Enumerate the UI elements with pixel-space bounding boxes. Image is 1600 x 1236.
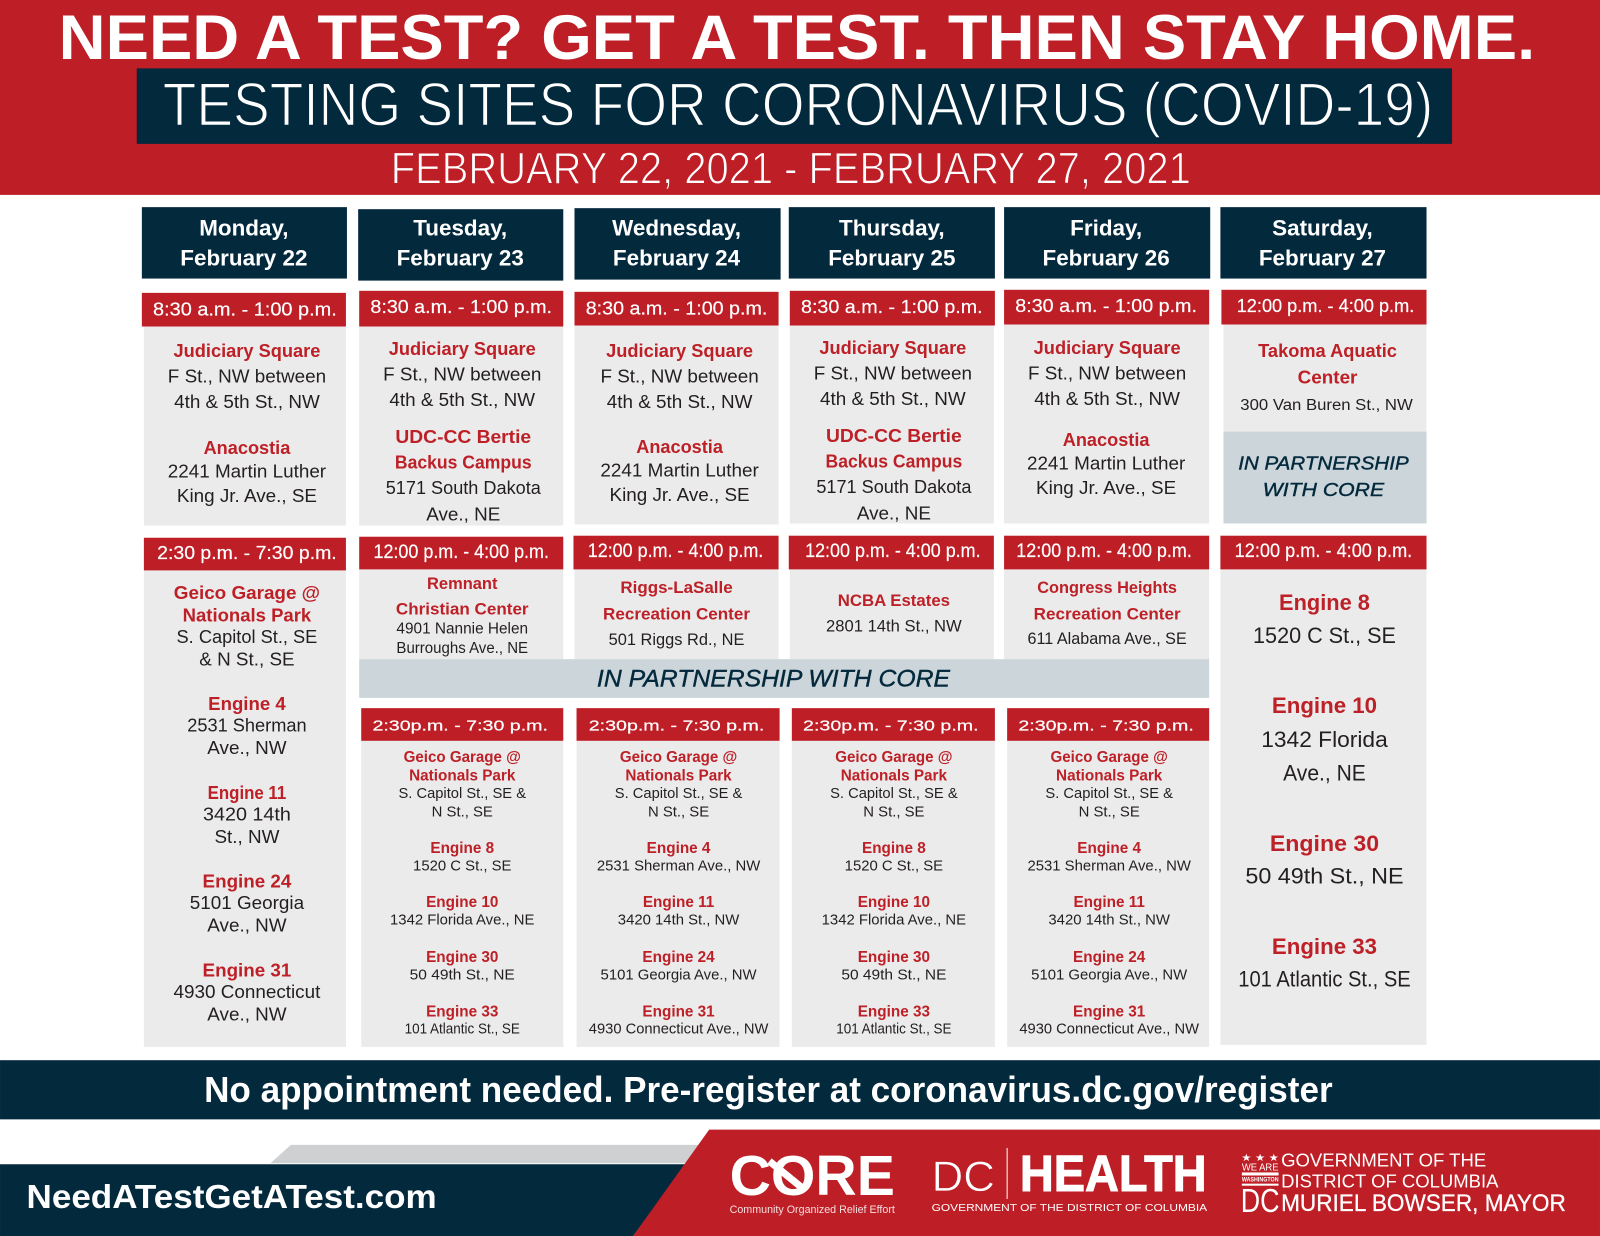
time bar: 8:30 a.m. - 1:00 p.m. [586,297,767,318]
time bar [144,538,346,570]
title: NEED A TEST? GET A TEST. THEN STAY HOME. [59,3,1535,73]
day header: Tuesday: Tuesday, [413,216,507,241]
panel: Monday afternoon: 5101 Georgia [190,892,305,913]
panel: Monday morning: Anacostia [204,437,291,458]
registration banner [0,1060,1600,1119]
footer website band: NeedATestGetATest.com [27,1179,437,1216]
panel: Tuesday afternoon: 101 Atlantic St., SE [405,1022,520,1038]
panel: Wednesday midday: 501 Riggs Rd., NE [609,631,744,649]
panel: Wednesday midday: Recreation Center [603,604,750,623]
panel: Thursday afternoon: Engine 10 [858,894,930,911]
time bar: 12:00 p.m. - 4:00 p.m. [588,540,763,562]
panel: Wednesday morning: F St., NW between [600,366,759,387]
time bar [1004,536,1209,569]
panel: Friday afternoon: Nationals Park [1056,768,1163,785]
time bar: 12:00 p.m. - 4:00 p.m. [805,540,981,562]
header banner [0,0,1600,195]
panel: Wednesday afternoon: 2531 Sherman Ave., NW [597,858,760,874]
panel: Saturday afternoon: 50 49th St., NE [1245,864,1404,889]
panel: Tuesday morning: Backus Campus [395,451,532,472]
panel: Tuesday afternoon: N St., SE [432,804,493,820]
day header: Monday: February 22 [180,245,307,270]
panel: Thursday morning: 4th & 5th St., NW [820,388,966,409]
panel: Tuesday afternoon [361,708,563,1047]
panel: Tuesday midday [359,537,563,659]
panel: Friday morning: F St., NW between [1028,363,1186,384]
panel: Monday afternoon: 3420 14th [203,803,291,824]
panel: Friday morning: King Jr. Ave., SE [1036,477,1176,498]
panel: Friday afternoon [1007,708,1209,1047]
panel: Saturday morning: 300 Van Buren St., NW [1240,397,1413,414]
panel: Friday midday: Congress Heights [1037,578,1177,597]
partnership banner: IN PARTNERSHIP WITH CORE [597,666,951,693]
day header: Monday: Monday, [199,216,289,241]
day header: Wednesday [574,208,781,280]
panel: Friday afternoon: 5101 Georgia Ave., NW [1031,968,1187,984]
panel: Friday afternoon: Geico Garage @ [1051,749,1168,766]
time bar: 2:30 p.m. - 7:30 p.m. [157,542,337,563]
logo: Government of DC: WE ARE [1242,1162,1279,1173]
panel: Monday morning: 4th & 5th St., NW [174,391,320,412]
day header: Saturday: February 27 [1259,245,1386,270]
panel: Wednesday morning: 4th & 5th St., NW [607,391,753,412]
panel: Saturday afternoon: 1342 Florida [1261,727,1389,752]
time bar: 8:30 a.m. - 1:00 p.m. [153,298,337,319]
day header: Wednesday: Wednesday, [612,216,741,241]
time bar: 12:00 p.m. - 4:00 p.m. [373,541,549,563]
time bar: 2:30p.m. - 7:30 p.m. [372,719,548,735]
panel: Thursday midday: NCBA Estates [838,591,950,610]
panel: Friday afternoon: 3420 14th St., NW [1048,912,1170,928]
panel: Saturday afternoon [1220,536,1427,1045]
day header: Saturday [1220,207,1427,279]
panel: Friday morning: 4th & 5th St., NW [1034,388,1180,409]
panel: Wednesday afternoon: 5101 Georgia Ave., NW [601,968,757,984]
panel: Friday afternoon: Engine 4 [1077,840,1142,857]
day header: Monday [142,207,347,279]
logo: DC Health: GOVERNMENT OF THE DISTRICT OF COLUMBIA [932,1203,1207,1214]
footer website band [0,1145,704,1236]
panel: Tuesday afternoon: 50 49th St., NE [410,968,515,984]
panel: Saturday afternoon: Engine 10 [1272,693,1377,718]
panel: Wednesday morning: 2241 Martin Luther [600,460,759,481]
panel: Friday afternoon: N St., SE [1079,804,1140,820]
panel: Tuesday morning [359,291,563,526]
panel: Saturday morning [1221,290,1427,523]
panel: Tuesday afternoon: 1520 C St., SE [413,858,512,874]
panel: Tuesday afternoon: Nationals Park [409,768,516,785]
panel: Tuesday morning: F St., NW between [383,364,541,385]
panel: Monday afternoon: Ave., NW [207,915,287,936]
panel: Thursday morning [790,291,995,523]
panel: Tuesday morning: Judiciary Square [389,338,536,359]
panel: Thursday afternoon [792,708,995,1047]
panel: Monday afternoon: 2531 Sherman [187,715,307,736]
day header: Wednesday: February 24 [613,245,741,270]
panel: Saturday morning: Takoma Aquatic [1258,340,1397,361]
panel: Friday morning [1004,290,1209,523]
panel: Friday afternoon: Engine 31 [1073,1003,1146,1020]
day header: Friday [1004,207,1210,279]
time bar: 8:30 a.m. - 1:00 p.m. [801,296,983,317]
panel: Saturday afternoon: 101 Atlantic St., SE [1238,967,1411,992]
panel: Thursday midday [789,536,994,659]
panel: Thursday morning: 5171 South Dakota [816,476,972,497]
logo: Government of DC: DISTRICT OF COLUMBIA [1281,1171,1499,1192]
panel: Wednesday midday [573,536,779,659]
panel: Wednesday afternoon [577,708,780,1047]
day header: Thursday: Thursday, [839,216,945,241]
panel: Monday afternoon: Engine 24 [203,871,292,892]
day header: Thursday [789,207,995,279]
panel: Wednesday afternoon: Nationals Park [625,768,732,785]
time bar: 2:30p.m. - 7:30 p.m. [589,719,764,735]
date range: FEBRUARY 22, 2021 - FEBRUARY 27, 2021 [391,143,1191,194]
registration banner: No appointment needed. Pre-register at coronavirus.dc.gov/register [204,1070,1333,1110]
panel: Monday afternoon: Ave., NW [207,737,287,758]
time bar: 2:30p.m. - 7:30 p.m. [803,719,979,735]
panel: Tuesday afternoon: S. Capitol St., SE & [398,786,526,802]
time bar: 2:30p.m. - 7:30 p.m. [1018,719,1194,735]
panel: Tuesday afternoon: Geico Garage @ [404,749,521,766]
panel: Saturday afternoon: Engine 8 [1279,590,1370,615]
time bar [790,291,995,326]
panel: Thursday afternoon: Engine 33 [858,1003,930,1020]
panel: Tuesday afternoon: Engine 10 [426,894,498,911]
day header: Friday: February 26 [1043,245,1170,270]
panel: Monday morning: 2241 Martin Luther [168,461,326,482]
time bar [789,536,994,569]
panel: Saturday afternoon: Engine 33 [1272,934,1377,959]
panel: Monday afternoon: S. Capitol St., SE [177,626,317,647]
panel: Tuesday midday: Remnant [427,574,498,593]
panel: Thursday afternoon: Nationals Park [841,768,947,785]
panel: Friday afternoon: Engine 11 [1073,894,1145,911]
panel: Monday afternoon: Engine 4 [208,693,286,714]
subtitle bar: TESTING SITES FOR CORONAVIRUS (COVID-19) [163,71,1433,139]
panel: Tuesday midday: 4901 Nannie Helen [396,621,528,638]
panel: Thursday afternoon: 1520 C St., SE [845,858,943,874]
panel: Friday morning: 2241 Martin Luther [1027,452,1185,473]
time bar: 12:00 p.m. - 4:00 p.m. [1237,295,1414,316]
day header: Tuesday: February 23 [397,245,524,270]
logo: Government of DC [1241,1149,1566,1220]
panel: Friday afternoon: 4930 Connecticut Ave., NW [1019,1022,1199,1038]
panel: Tuesday afternoon: Engine 8 [430,840,495,857]
panel: Monday afternoon: Ave., NW [207,1003,287,1024]
panel: Wednesday midday: Riggs-LaSalle [620,578,733,597]
panel: Saturday afternoon: Engine 30 [1270,831,1379,856]
logo: DC Health: HEALTH [1020,1145,1207,1202]
panel: Thursday morning: Judiciary Square [819,337,966,358]
partnership note: WITH CORE [1263,479,1385,500]
panel: Friday afternoon: Engine 24 [1073,949,1146,966]
panel: Monday afternoon [144,538,346,1047]
panel: Wednesday afternoon: 3420 14th St., NW [618,912,739,928]
day header: Friday: Friday, [1070,216,1142,241]
panel: Thursday afternoon: S. Capitol St., SE & [830,786,958,802]
panel: Wednesday afternoon: Engine 4 [647,840,711,857]
panel: Monday afternoon: Nationals Park [183,604,312,625]
panel: Wednesday afternoon: S. Capitol St., SE & [615,786,742,802]
time bar [142,293,346,327]
day header: Saturday: Saturday, [1272,216,1373,241]
logo: Government of DC: ★ ★ ★ [1241,1153,1279,1164]
panel: Monday afternoon: Engine 11 [208,782,286,803]
panel: Thursday afternoon: 1342 Florida Ave., NE [822,912,966,928]
panel: Friday afternoon: 2531 Sherman Ave., NW [1027,858,1191,874]
time bar: 12:00 p.m. - 4:00 p.m. [1235,540,1412,562]
panel: Thursday afternoon: N St., SE [863,804,925,820]
time bar [359,291,563,327]
panel: Monday afternoon: Geico Garage @ [174,582,320,603]
time bar [1221,290,1427,324]
partnership banner [359,659,1209,698]
logo: Government of DC: GOVERNMENT OF THE [1281,1149,1486,1170]
time bar [1007,708,1209,741]
logo: Government of DC: WASHINGTON [1242,1177,1279,1184]
logo: DC Health [932,1145,1207,1214]
panel: Tuesday morning: UDC-CC Bertie [395,426,531,447]
panel: Thursday morning: UDC-CC Bertie [826,425,962,446]
panel: Wednesday afternoon: Engine 11 [643,894,715,911]
logo: CORE: Community Organized Relief Effort [730,1204,895,1216]
time bar [577,708,780,741]
panel: Monday morning: King Jr. Ave., SE [177,485,317,506]
panel: Tuesday afternoon: Engine 33 [426,1003,498,1020]
panel: Thursday afternoon: Engine 8 [862,840,926,857]
panel: Wednesday morning [574,292,779,524]
panel: Friday morning: Judiciary Square [1034,337,1181,358]
panel: Tuesday midday: Burroughs Ave., NE [396,640,528,657]
logo: CORE: CORE [730,1144,895,1207]
panel: Monday morning [142,293,346,526]
panel: Friday midday: 611 Alabama Ave., SE [1028,630,1187,648]
time bar [1004,290,1209,324]
panel: Wednesday afternoon: Engine 24 [642,949,715,966]
panel: Thursday afternoon: Engine 30 [858,949,930,966]
panel: Wednesday afternoon: N St., SE [648,804,709,820]
panel: Monday afternoon: St., NW [214,826,280,847]
panel: Thursday morning: Backus Campus [826,450,962,471]
day header: Tuesday [358,209,563,281]
panel: Saturday afternoon: 1520 C St., SE [1253,623,1396,648]
time bar: 8:30 a.m. - 1:00 p.m. [370,296,552,317]
panel: Monday afternoon: Engine 31 [203,960,291,981]
panel: Saturday afternoon: Ave., NE [1283,761,1366,786]
panel: Wednesday morning: Anacostia [636,436,723,457]
panel: Thursday afternoon: Geico Garage @ [835,749,953,766]
panel: Monday morning: Judiciary Square [173,340,320,361]
partnership note [1223,432,1427,523]
time bar [1220,536,1427,569]
panel: Wednesday morning: King Jr. Ave., SE [610,484,750,505]
panel: Thursday midday: 2801 14th St., NW [826,618,962,636]
time bar: 8:30 a.m. - 1:00 p.m. [1015,295,1197,316]
panel: Friday midday: Recreation Center [1034,604,1181,623]
panel: Tuesday morning: 5171 South Dakota [386,477,541,498]
panel: Tuesday midday: Christian Center [396,599,529,618]
logo: Government of DC: DC [1241,1183,1280,1220]
panel: Tuesday afternoon: 1342 Florida Ave., NE [390,912,535,928]
time bar [573,536,779,569]
panel: Wednesday afternoon: 4930 Connecticut Ave., NW [589,1022,768,1038]
panel: Tuesday morning: Ave., NE [426,503,500,524]
panel: Friday afternoon: S. Capitol St., SE & [1045,786,1173,802]
panel: Tuesday morning: 4th & 5th St., NW [389,389,535,410]
panel: Monday morning: F St., NW between [168,366,326,387]
day header: Thursday: February 25 [828,245,955,270]
time bar: 12:00 p.m. - 4:00 p.m. [1016,540,1192,562]
panel: Thursday afternoon: 101 Atlantic St., SE [836,1022,952,1038]
logo: DC Health: DC [932,1153,995,1201]
panel: Friday morning: Anacostia [1063,429,1150,450]
logo: Government of DC: MURIEL BOWSER, MAYOR [1281,1190,1566,1217]
footer logos band [633,1130,1600,1236]
partnership note: IN PARTNERSHIP [1238,452,1409,473]
panel: Monday afternoon: 4930 Connecticut [174,981,321,1002]
panel: Wednesday afternoon: Geico Garage @ [620,749,737,766]
panel: Thursday afternoon: 50 49th St., NE [841,968,946,984]
panel: Thursday morning: Ave., NE [857,502,931,523]
panel: Tuesday afternoon: Engine 30 [426,949,498,966]
time bar [574,292,779,326]
time bar [359,537,563,569]
panel: Monday afternoon: & N St., SE [199,648,295,669]
time bar [792,708,995,741]
time bar [361,708,563,741]
panel: Friday midday [1004,536,1209,659]
panel: Wednesday morning: Judiciary Square [606,340,753,361]
panel: Thursday morning: F St., NW between [814,363,972,384]
panel: Saturday morning: Center [1298,367,1358,388]
panel: Wednesday afternoon: Engine 31 [642,1003,715,1020]
